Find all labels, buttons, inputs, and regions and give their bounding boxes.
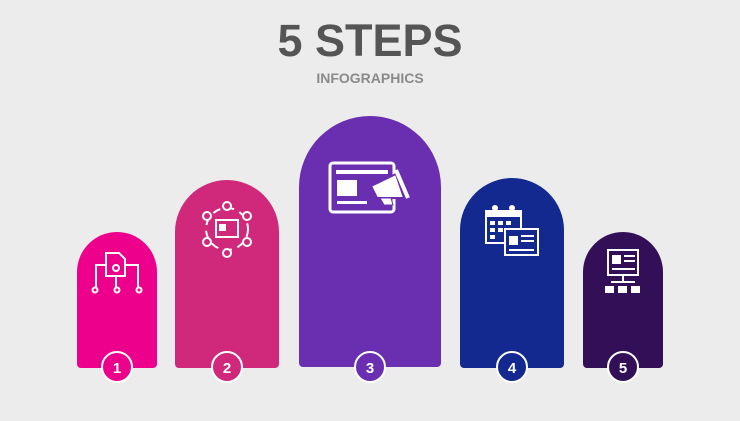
number badge 4 xyxy=(497,352,527,382)
panel: step 4 xyxy=(460,178,564,382)
icon: document gear network xyxy=(92,253,142,292)
panel: step 2 xyxy=(175,180,279,382)
icon: circle network with document xyxy=(203,202,251,257)
number badge 3 xyxy=(355,352,385,382)
number badge 1: 1 xyxy=(113,360,121,377)
panel: step 3 xyxy=(299,116,441,382)
title: 5 STEPS xyxy=(277,15,463,66)
icon: page with hierarchy xyxy=(605,250,640,293)
number badge 2 xyxy=(212,352,242,382)
icon: calendar and document xyxy=(486,205,538,255)
panel: step 1 xyxy=(77,232,157,382)
number badge 2: 2 xyxy=(223,360,231,377)
icon: web page with megaphone xyxy=(330,163,408,212)
panel: step 5 xyxy=(583,232,663,382)
number badge 3: 3 xyxy=(366,360,374,377)
number badge 1 xyxy=(102,352,132,382)
subtitle: INFOGRAPHICS xyxy=(316,70,424,86)
number badge 5 xyxy=(608,352,638,382)
number badge 5: 5 xyxy=(619,360,627,377)
number badge 4: 4 xyxy=(508,360,517,377)
